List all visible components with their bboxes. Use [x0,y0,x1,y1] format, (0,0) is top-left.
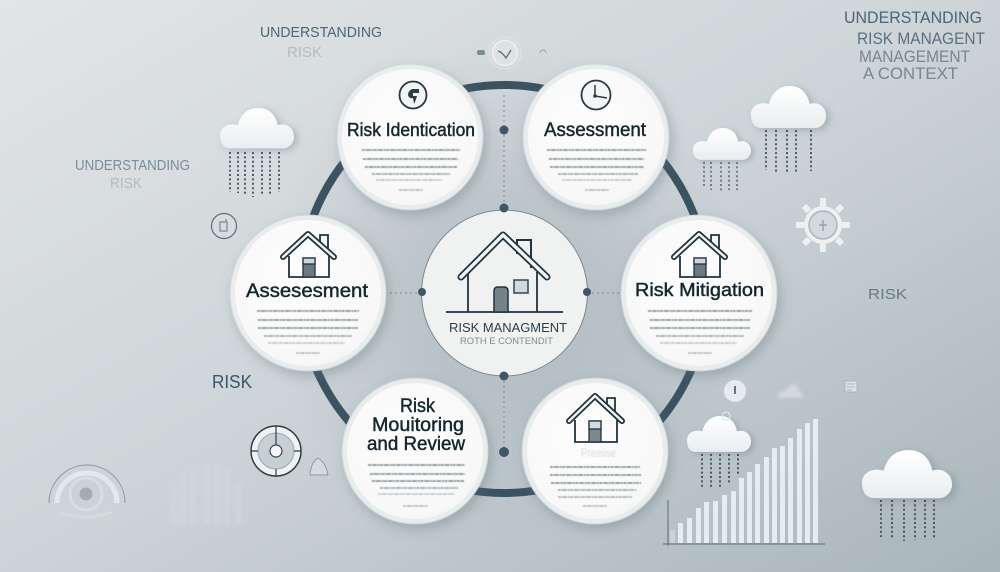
panel: risk mitigation [621,215,777,371]
heading: Mouitoring [372,415,464,436]
heading: understanding risk left: UNDERSTANDING [75,157,190,174]
panel: unlabelled house stage [522,378,668,524]
heading: risk management context: UNDERSTANDING [844,9,982,27]
heading: Assessment [544,120,647,141]
ring connecting the stages [300,85,708,493]
icon: cloud with rain, lower middle [687,416,751,489]
icon: house [569,396,622,442]
heading: understanding risk top: RISK [287,44,322,61]
body text lines [648,311,752,353]
heading: risk management context: A CONTEXT [863,65,958,83]
icon: concentric half-dome [49,465,125,517]
connector nodes [418,126,591,457]
label: risk bottom left: RISK [212,372,252,392]
heading: risk management context: MANAGEMENT [859,48,970,66]
heading: Risk [400,396,435,417]
dotted connectors [385,95,622,450]
heading [367,396,465,455]
heading: understanding risk left: RISK [110,175,142,192]
body text lines [547,150,646,190]
heading: and Review [367,434,465,455]
icon: house [283,234,334,277]
icon: target dial [251,426,301,477]
panel: assessment left [230,215,386,371]
heading: understanding risk left [75,157,190,192]
icon: small badge left [212,214,236,238]
body text lines [368,465,465,506]
heading: Risk Identication [347,119,475,140]
body text lines [257,311,359,353]
icon: top small ornament [477,37,546,69]
icon: gear [796,198,850,252]
icon: cloud with rain, upper right [751,86,826,174]
label: risk right: RISK [868,286,907,303]
faded mini cloud [777,384,804,398]
icon: small pen badge [724,380,746,402]
icon: target badge [400,82,426,108]
heading: risk management context: RISK MANAGENT [857,30,985,48]
icon: cloud with rain, small upper right [693,128,751,191]
heading: Assesesment [246,280,369,302]
panel: assessment top [523,64,669,210]
panel: risk monitoring and review [342,378,488,524]
icon: cloud with rain, upper left [220,108,294,197]
icon: clock [582,80,610,110]
panel: risk identification [337,64,483,210]
icon: small coin [722,412,730,420]
faded heading: Premise [581,446,616,460]
heading: risk management: RISK MANAGMENT [449,321,567,335]
body text lines [362,150,460,190]
heading: risk management context [844,9,985,83]
subheading: context: ROTH E CONTENDIT [460,336,553,347]
panel: central risk management [422,210,588,376]
heading: Risk Mitigation [635,279,764,300]
icon: house [674,234,725,277]
heading: understanding risk top [260,24,382,61]
icon: cloud with rain, lower right [862,450,952,541]
body text lines [550,467,641,506]
icon: central house [446,235,563,312]
bar chart: rising risk [663,419,825,546]
icon: small list card [845,381,857,392]
faded bar graphic [171,465,242,526]
heading: understanding risk top: UNDERSTANDING [260,24,382,41]
icon: small pin near dial [310,458,328,475]
